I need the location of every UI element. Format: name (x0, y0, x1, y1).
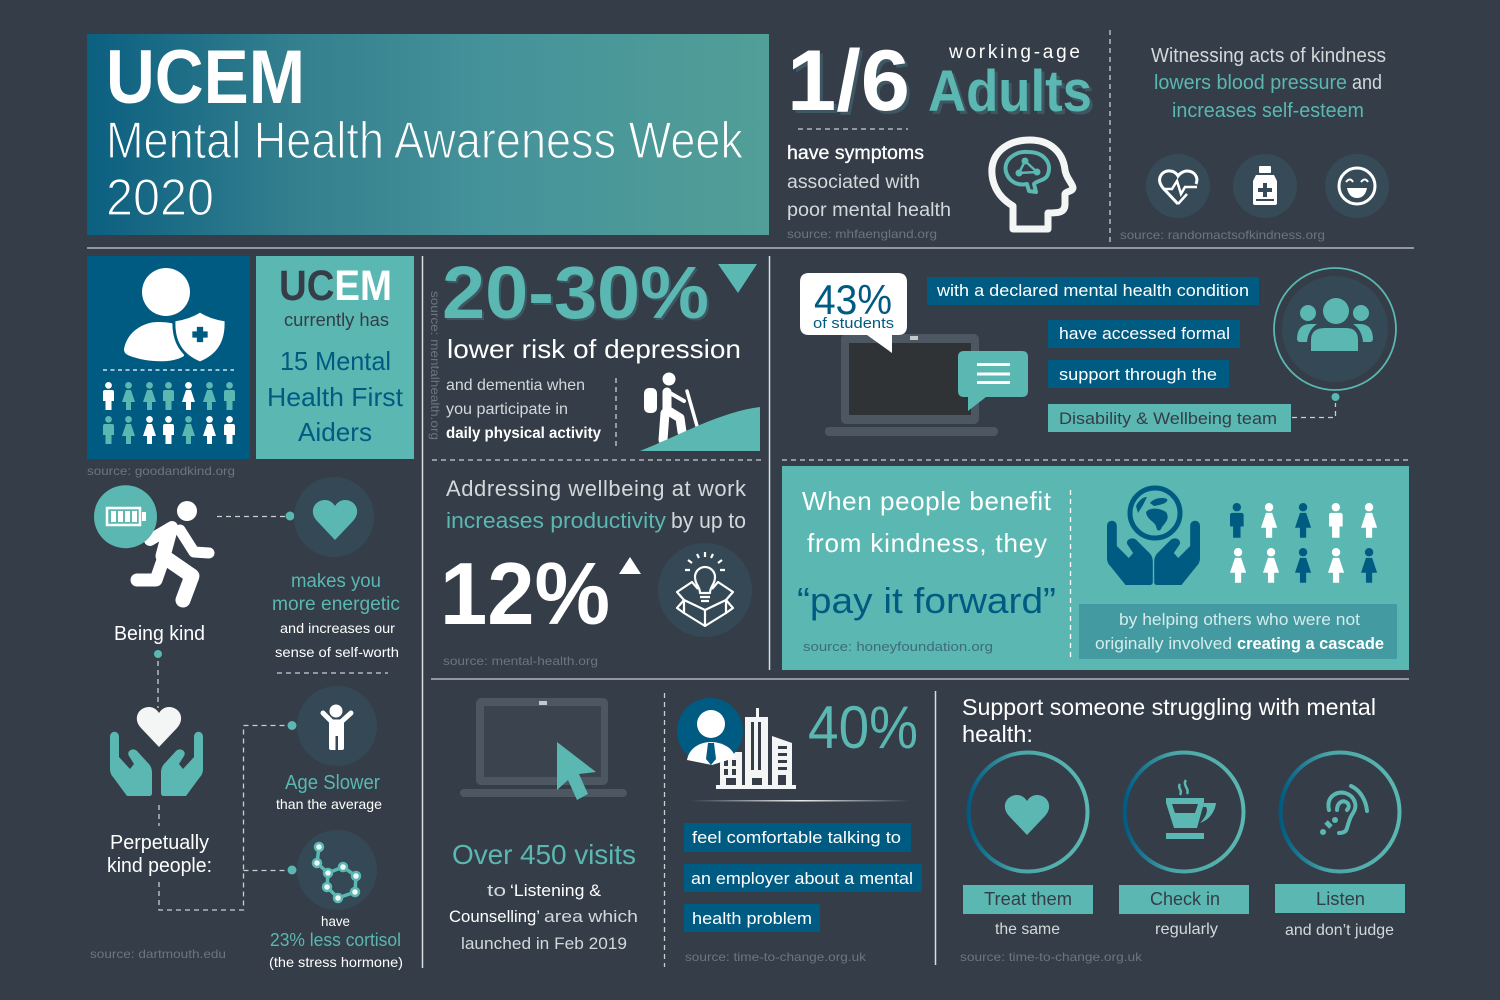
icon: lightbulb in box (658, 543, 752, 637)
label: comfortable talking: feel comfortable talking to (692, 828, 901, 847)
vertical divider (1109, 30, 1111, 242)
panel: first aiders text (256, 256, 414, 459)
source: source: dartmouth.edu (90, 947, 226, 961)
text: witnessing kindness: Witnessing acts of kindness (1151, 45, 1386, 67)
callout: 43 percent: of students (813, 315, 894, 332)
text: age slower: than the average (276, 796, 382, 812)
text: listening and counselling (449, 881, 638, 953)
panel: lower risk of depression (428, 251, 762, 460)
text: cascade: creating a cascade (1237, 634, 1384, 653)
text: dementia: and dementia when (446, 377, 585, 394)
logo: UCEM: UCEM (279, 262, 392, 310)
text: listening and counselling: area which (544, 907, 638, 926)
source: source: mhfaengland.org (787, 227, 937, 241)
icon: hiker on hill (640, 372, 760, 451)
label: health problem (684, 904, 820, 932)
title year: 2020 (106, 169, 214, 227)
text: less cortisol: 23% less cortisol (270, 930, 401, 950)
text: 15 mental health first aiders (267, 346, 404, 447)
divider lines (87, 248, 1414, 679)
source: source: time-to-change.org.uk (685, 950, 867, 964)
text: lower risk of depression: lower risk of depression (447, 334, 741, 364)
pictogram: staff people (103, 382, 235, 444)
text: listening and counselling: Counselling’ (449, 907, 540, 926)
text: age slower (276, 772, 382, 812)
text: listening and counselling: ‘Listening & (510, 881, 602, 900)
icon: running figure (137, 501, 209, 600)
panel: 40 percent employer (677, 694, 922, 964)
text: makes you more energetic (272, 571, 400, 660)
panel: 450 visits (449, 698, 638, 953)
label: treat them: Treat them (984, 889, 1072, 909)
text: symptoms: have symptoms (787, 143, 924, 164)
icon: battery (94, 485, 157, 548)
icon: person with shield (124, 268, 226, 363)
label: perpetually kind people: kind people: (107, 855, 212, 877)
label: listen: and don’t judge (1285, 922, 1394, 939)
statistic: 1/6: 1/6 (787, 33, 910, 129)
label: being kind: Being kind (114, 623, 205, 645)
source: source: randomactsofkindness.org (1120, 228, 1325, 242)
source: source: mental-health.org (443, 654, 598, 668)
text: makes you more energetic: and increases our (280, 620, 395, 636)
arrow: up (619, 557, 641, 574)
icon: head with brain (992, 140, 1073, 229)
text: when people benefit: When people benefit (802, 486, 1052, 516)
source: source: goodandkind.org (87, 464, 235, 478)
panel: being kind (94, 477, 400, 708)
panel: wellbeing at work (440, 476, 752, 668)
text: witnessing kindness: lowers blood pressure (1154, 72, 1347, 94)
text: dementia: you participate in (446, 401, 568, 418)
text: less cortisol: (the stress hormone) (269, 954, 403, 970)
label: employer (684, 864, 922, 892)
label: working-age: working-age (948, 42, 1080, 63)
text: addressing wellbeing (446, 476, 747, 533)
label: support through (1048, 360, 1229, 388)
title: Mental Health Awareness Week (106, 112, 744, 170)
icon: laptop with cursor (460, 698, 627, 800)
icon: hearing ring (1280, 752, 1400, 872)
label: disability team: Disability & Wellbeing team (1059, 409, 1277, 428)
label: check in: regularly (1155, 921, 1218, 938)
label: support through: support through the (1059, 365, 1217, 384)
panel: pay it forward (782, 466, 1409, 670)
panel: first aiders pictogram (87, 256, 250, 459)
heading: Support someone struggling with mental (962, 694, 1376, 720)
label: disability team (1048, 404, 1291, 432)
text: makes you more energetic: sense of self-worth (275, 644, 399, 660)
label: listen (1275, 884, 1405, 939)
text: when people benefit: from kindness, they (807, 528, 1047, 558)
icon: laptop (825, 334, 998, 436)
label: declared condition: with a declared mental health condition (936, 281, 1249, 300)
panel: perpetually kind people (90, 686, 403, 970)
label: treat them (963, 885, 1093, 938)
icon: heart pulse (1146, 154, 1210, 218)
pictogram: people (1230, 503, 1377, 583)
label: check in: Check in (1150, 889, 1220, 909)
label: employer: an employer about a mental (691, 869, 913, 888)
text: witnessing kindness: increases self-esteem (1172, 100, 1364, 122)
statistic: 12%: 12% (440, 544, 610, 643)
text: less cortisol (269, 913, 403, 970)
panel: witnessing kindness (1120, 45, 1389, 242)
text: dementia (446, 377, 601, 442)
text: 15 mental health first aiders: 15 Mental (280, 346, 391, 376)
text: age slower: Age Slower (285, 772, 380, 794)
statistic: 40%: 40% (808, 694, 918, 761)
label: declared condition (927, 277, 1259, 305)
text: addressing wellbeing: by up to (671, 508, 746, 533)
icon: business person and buildings (677, 698, 796, 789)
text: when people benefit (802, 486, 1052, 558)
text: currently has: currently has (284, 310, 389, 330)
text: over 450 visits: Over 450 visits (452, 839, 636, 870)
text: symptoms (787, 143, 951, 221)
text: cascade (1079, 604, 1397, 659)
text: witnessing kindness (1151, 45, 1386, 122)
label: Adults: Adults (928, 59, 1092, 124)
label: accessed formal (1048, 320, 1240, 348)
icon: heart ring (968, 752, 1088, 872)
source: source: honeyfoundation.org (803, 639, 993, 654)
text: cascade: originally involved (1095, 634, 1232, 653)
text: symptoms: poor mental health (787, 200, 951, 221)
text: dementia: daily physical activity (446, 425, 601, 442)
text: cascade: by helping others who were not (1119, 610, 1360, 629)
icon: molecule in circle (297, 830, 377, 910)
icon: heart in circle (294, 477, 374, 557)
heading: health: (962, 721, 1033, 747)
text: 15 mental health first aiders: Aiders (298, 417, 372, 447)
text: listening and counselling: to (487, 881, 506, 900)
text: makes you more energetic: more energetic (272, 594, 400, 615)
text: makes you more energetic: makes you (291, 571, 381, 592)
label: treat them: the same (995, 921, 1060, 938)
callout: 43 percent: 43% (814, 276, 892, 323)
label: perpetually kind people (107, 832, 212, 877)
statistic: 20-30%: 20-30% (442, 251, 709, 334)
icon: group in ring (1274, 268, 1396, 390)
callout: 43 percent (800, 273, 907, 353)
icon: medicine bottle (1233, 154, 1297, 218)
icon: globe in hands (1107, 488, 1200, 585)
source: source: time-to-change.org.uk (960, 950, 1143, 964)
text: less cortisol: have (321, 913, 350, 929)
text: addressing wellbeing: increases productivity (446, 508, 666, 533)
text: listening and counselling: launched in Feb 2019 (461, 934, 627, 953)
text: witnessing kindness: and (1352, 72, 1382, 94)
text: addressing wellbeing: Addressing wellbeing at work (446, 476, 747, 501)
text: 15 mental health first aiders: Health First (267, 382, 404, 412)
label: accessed formal: have accessed formal (1059, 324, 1230, 343)
label: comfortable talking (684, 823, 911, 852)
label: listen: Listen (1316, 889, 1365, 909)
icon: chat bubble (958, 351, 1028, 411)
text: symptoms: associated with (787, 172, 920, 193)
heading (962, 694, 1376, 747)
source: source: mentalhealth.org (428, 291, 442, 440)
label: perpetually kind people: Perpetually (110, 832, 209, 854)
arrow: down (718, 264, 757, 293)
panel: one in six adults (787, 33, 1092, 241)
panel: support someone (960, 694, 1405, 964)
icon: smiley (1325, 154, 1389, 218)
icon: coffee ring (1124, 752, 1244, 872)
label: check in (1119, 885, 1249, 938)
icon: child in circle (297, 686, 377, 766)
label: health problem: health problem (692, 909, 812, 928)
logo: UCEM: UCEM (106, 35, 305, 120)
text: pay it forward: “pay it forward” (797, 580, 1056, 621)
icon: heart in hands (110, 707, 203, 796)
panel: header banner (87, 34, 769, 235)
panel: 43 percent of students (800, 268, 1396, 436)
